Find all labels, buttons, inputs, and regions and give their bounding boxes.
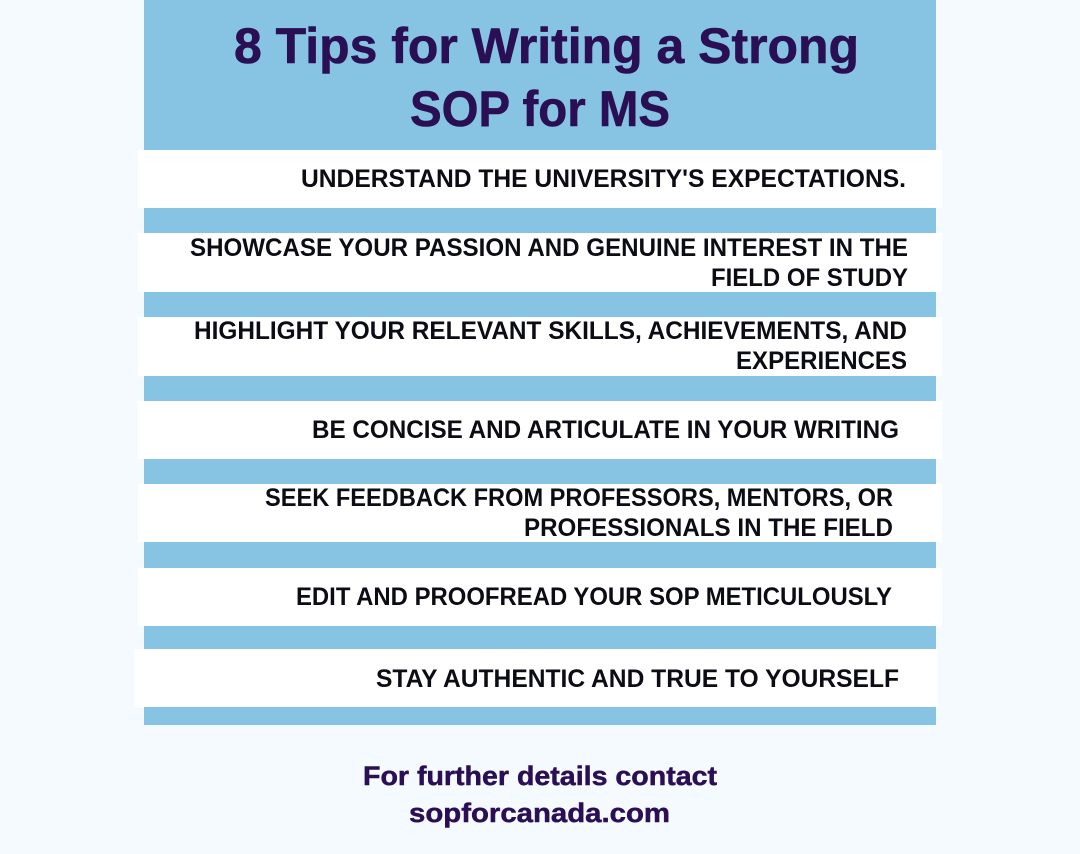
tip 6: EDIT AND PROOFREAD YOUR SOP METICULOUSLY [296, 583, 892, 611]
tip 4: BE CONCISE AND ARTICULATE IN YOUR WRITING [312, 416, 899, 444]
title [234, 18, 859, 137]
footer contact text [363, 761, 717, 828]
tip 2 [138, 233, 942, 292]
tip 7 [134, 649, 938, 707]
tip 5: SEEK FEEDBACK FROM PROFESSORS, MENTORS, OR [265, 484, 893, 512]
tip 7: STAY AUTHENTIC AND TRUE TO YOURSELF [376, 665, 899, 693]
footer contact text: For further details contact [363, 761, 717, 791]
tip 1 [138, 150, 942, 208]
tip 2: SHOWCASE YOUR PASSION AND GENUINE INTEREST IN THE [190, 234, 908, 262]
title: 8 Tips for Writing a Strong [234, 18, 859, 74]
panel: blue background column [144, 0, 936, 725]
tip 2: FIELD OF STUDY [711, 264, 908, 292]
tip 3 [138, 317, 942, 376]
tip 5 [138, 484, 942, 542]
tip 5: PROFESSIONALS IN THE FIELD [524, 514, 893, 542]
tip 3: HIGHLIGHT YOUR RELEVANT SKILLS, ACHIEVEMENTS, AND [194, 317, 907, 345]
tip 4 [138, 401, 942, 459]
tip 3: EXPERIENCES [736, 347, 907, 375]
title: SOP for MS [410, 81, 670, 137]
tip 1: UNDERSTAND THE UNIVERSITY'S EXPECTATIONS. [301, 165, 906, 193]
tip 6 [138, 568, 942, 626]
footer contact text: sopforcanada.com [409, 798, 670, 828]
